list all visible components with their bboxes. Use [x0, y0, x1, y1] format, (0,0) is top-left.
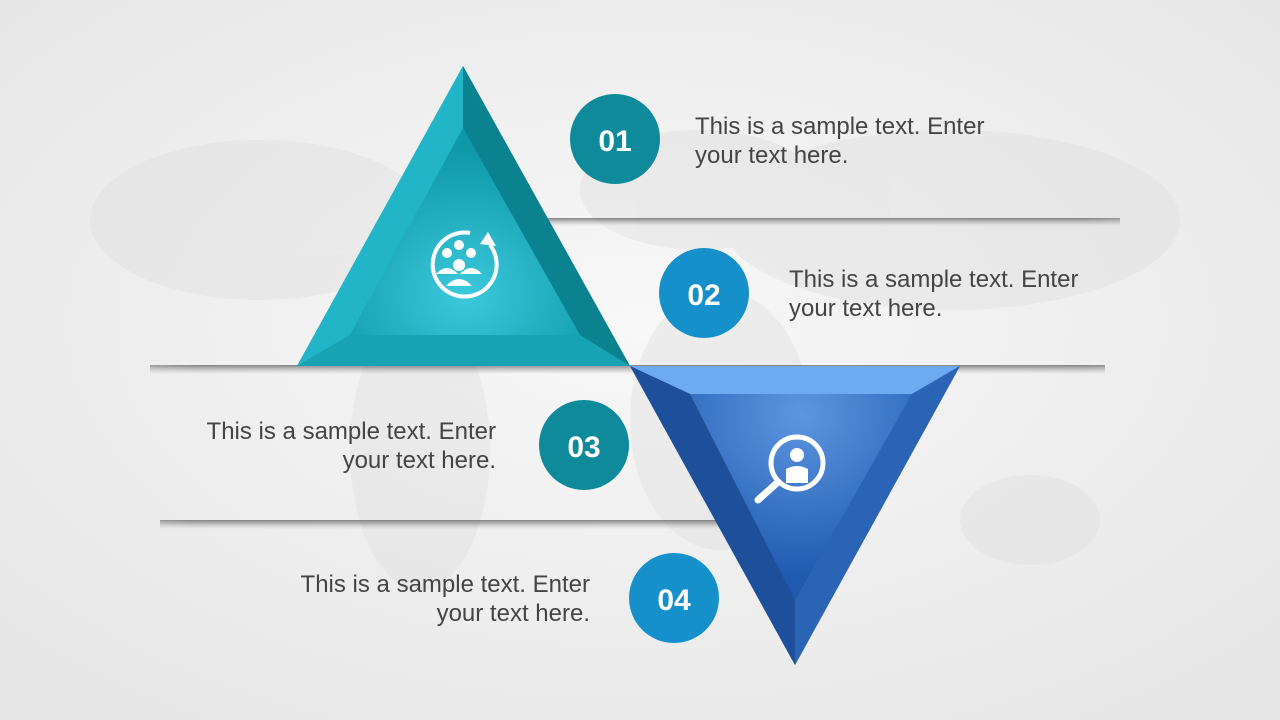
step 03: [207, 400, 629, 490]
step 03: 03: [567, 431, 601, 464]
step 03: your text here.: [343, 447, 496, 474]
step 03: This is a sample text. Enter: [207, 418, 496, 445]
step 01: This is a sample text. Enter: [695, 113, 984, 140]
step 04: [301, 553, 719, 643]
step 04: 04: [657, 584, 691, 617]
icon: people with refresh arrow: [433, 232, 497, 297]
step 02: This is a sample text. Enter: [789, 266, 1078, 293]
step 04: your text here.: [437, 600, 590, 627]
icon: magnifier with person: [758, 437, 823, 500]
step 02: [659, 248, 1078, 338]
step 01: your text here.: [695, 142, 848, 169]
divider shadows: [150, 218, 1120, 529]
triangle down (blue): [630, 366, 960, 665]
triangle up (teal): [297, 66, 630, 366]
step 02: 02: [687, 279, 721, 312]
world map (approximate): [90, 130, 1180, 590]
step 01: [570, 94, 984, 184]
step 02: your text here.: [789, 295, 942, 322]
step 01: 01: [598, 125, 632, 158]
step 04: This is a sample text. Enter: [301, 571, 590, 598]
